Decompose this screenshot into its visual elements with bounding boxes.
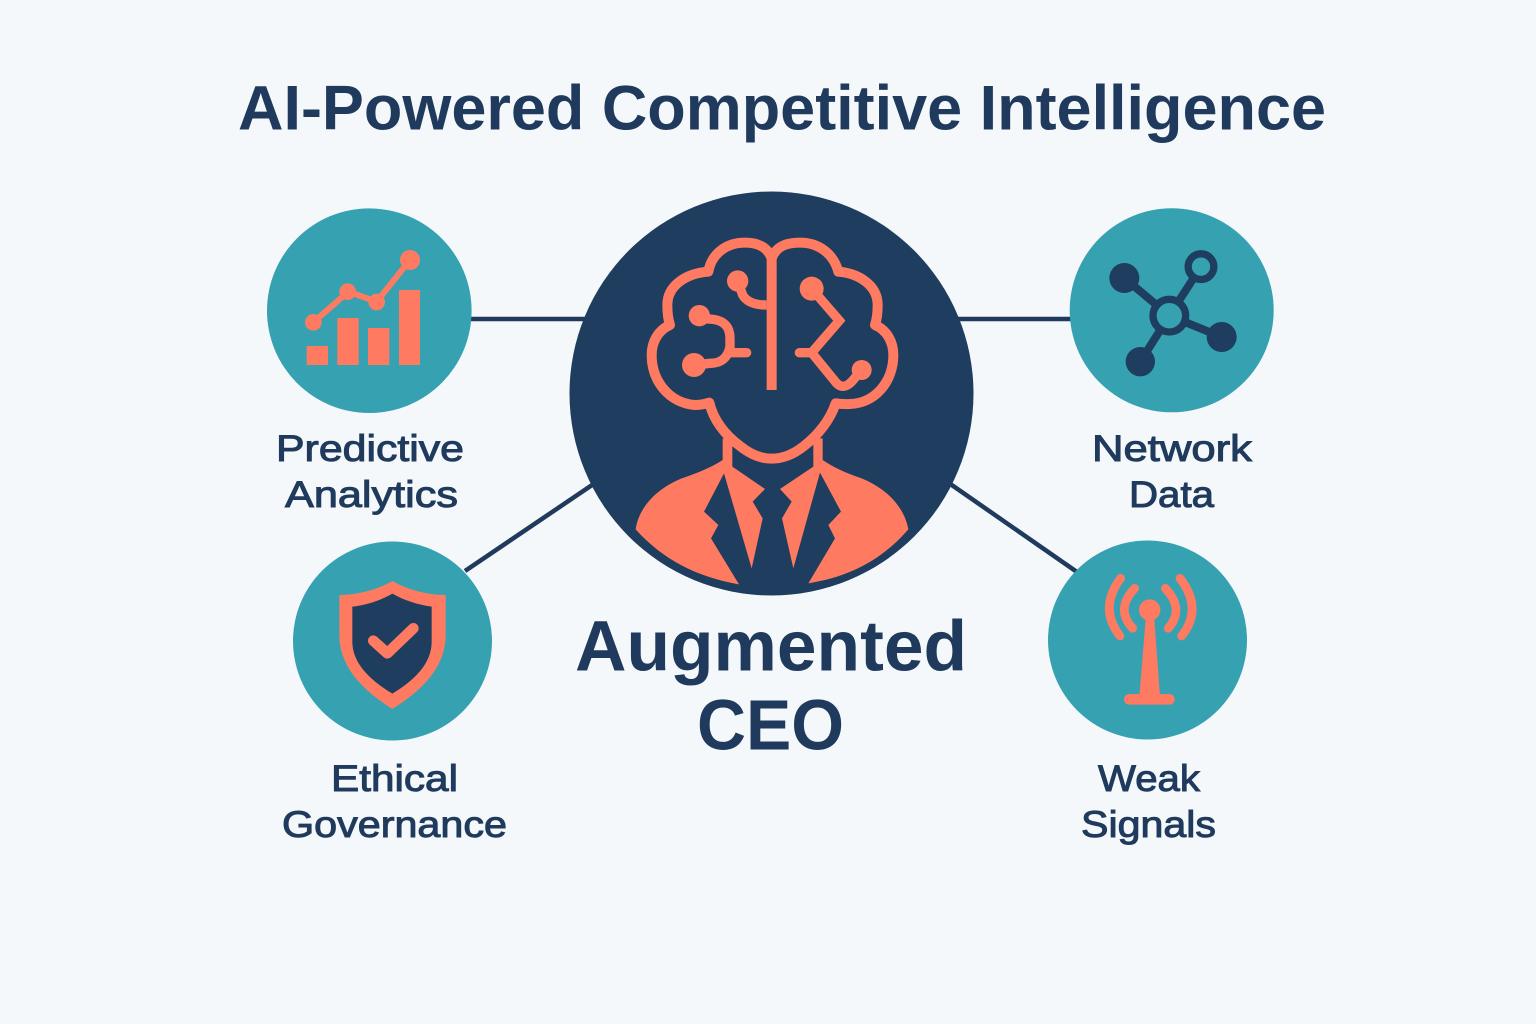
central label: Augmented (575, 608, 967, 686)
central label: CEO (697, 686, 844, 766)
central circle: augmented CEO portrait (570, 192, 974, 596)
panel: ethical governance (282, 542, 507, 845)
icon: brain outline and face (652, 243, 893, 459)
label: network data (1092, 428, 1253, 515)
label: weak signals: Weak (1098, 758, 1201, 799)
label: weak signals: Signals (1081, 804, 1216, 845)
icon: suit right (780, 438, 908, 583)
icon: signal tower (1109, 578, 1192, 699)
icon: suit left (636, 438, 765, 584)
label: weak signals (1081, 758, 1216, 845)
icon: shield with check (339, 581, 446, 709)
connector lines (465, 319, 1077, 572)
label: ethical governance: Ethical (331, 758, 458, 799)
panel: network data (1070, 208, 1274, 515)
label: network data: Network (1092, 428, 1253, 469)
panel: weak signals (1048, 540, 1247, 845)
title: AI-Powered Competitive Intelligence (238, 74, 1326, 144)
icon: network nodes (1109, 254, 1237, 376)
label: network data: Data (1129, 474, 1214, 515)
icon: right circuit traces (799, 277, 872, 386)
icon: brain centre line (757, 257, 787, 390)
panel: predictive analytics (267, 208, 472, 515)
icon: left circuit traces (682, 270, 767, 377)
label: ethical governance: Governance (282, 804, 507, 845)
label: predictive analytics: Predictive (276, 428, 464, 469)
central label (575, 608, 967, 766)
icon: bar and line chart (305, 250, 420, 365)
label: ethical governance (282, 758, 507, 845)
label: predictive analytics (276, 428, 464, 515)
label: predictive analytics: Analytics (285, 474, 458, 515)
